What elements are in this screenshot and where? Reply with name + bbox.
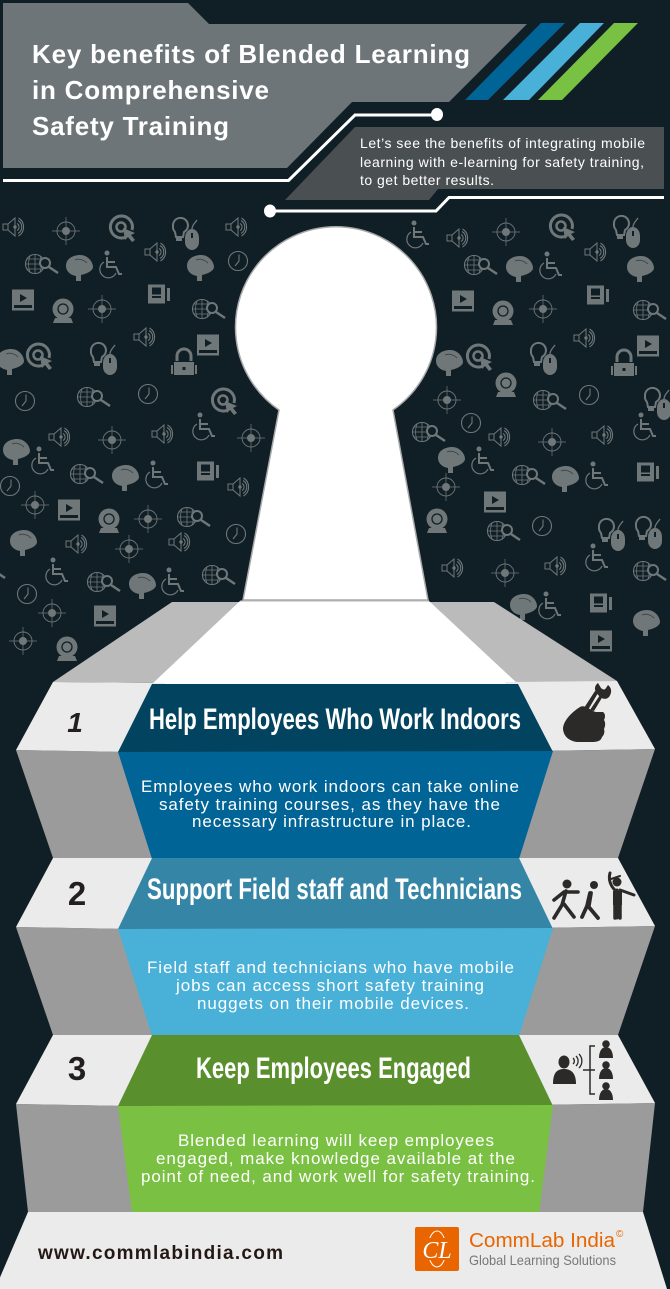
step 1 number: 1 bbox=[67, 707, 83, 738]
step 1 text bbox=[141, 777, 519, 831]
icon: people walking bbox=[554, 873, 634, 918]
step 3 text: Blended learning will keep employees bbox=[178, 1131, 494, 1150]
step 2 text: nuggets on their mobile devices. bbox=[197, 994, 469, 1013]
step 3 text: engaged, make knowledge available at the bbox=[156, 1149, 515, 1168]
icon: hand holding wrench bbox=[563, 683, 611, 742]
step 2 heading band bbox=[118, 858, 553, 929]
logo: CommLab India bbox=[469, 1230, 616, 1252]
title: Safety Training bbox=[32, 111, 229, 141]
logo: Global Learning Solutions bbox=[469, 1252, 616, 1268]
step 3 bbox=[16, 1035, 655, 1213]
connector line with dot: intro bbox=[264, 198, 664, 218]
step 1 bbox=[16, 681, 655, 859]
step 3 text bbox=[141, 1131, 535, 1186]
intro text: to get better results. bbox=[360, 172, 494, 188]
step 1 text: necessary infrastructure in place. bbox=[192, 812, 471, 831]
title: in Comprehensive bbox=[32, 75, 269, 105]
step 1 heading band bbox=[118, 684, 553, 752]
logo bbox=[415, 1227, 624, 1271]
stair top bbox=[53, 601, 617, 684]
intro text: learning with e-learning for safety training, bbox=[360, 154, 644, 170]
step 3 text: point of need, and work well for safety training. bbox=[141, 1167, 535, 1186]
step 2 bbox=[16, 858, 655, 1036]
title bbox=[32, 39, 470, 141]
step 1 side faces bbox=[16, 681, 655, 858]
decorative stripes bbox=[465, 23, 638, 100]
step 1 text: safety training courses, as they have the bbox=[159, 795, 500, 814]
intro text bbox=[360, 135, 645, 188]
step 2 heading: Support Field staff and Technicians bbox=[147, 873, 522, 906]
background icon pattern bbox=[0, 215, 670, 661]
website url: www.commlabindia.com bbox=[37, 1243, 283, 1264]
title banner bbox=[3, 3, 527, 168]
footer bbox=[0, 1212, 667, 1289]
step 3 heading: Keep Employees Engaged bbox=[196, 1052, 471, 1085]
step 1 text: Employees who work indoors can take online bbox=[141, 777, 519, 796]
step 3 heading band bbox=[118, 1035, 553, 1106]
connector line with dot: title bbox=[3, 108, 443, 180]
icon: speaker addressing group bbox=[553, 1040, 613, 1100]
step 2 side faces bbox=[16, 858, 655, 1035]
logo: CL bbox=[422, 1238, 452, 1264]
step 1 body band bbox=[118, 751, 553, 859]
title: Key benefits of Blended Learning bbox=[32, 39, 470, 69]
step 2 body band bbox=[118, 928, 553, 1036]
step 2 text bbox=[147, 958, 514, 1013]
step 1 heading: Help Employees Who Work Indoors bbox=[149, 703, 521, 736]
intro text: Let’s see the benefits of integrating mobile bbox=[360, 135, 645, 151]
step 2 number: 2 bbox=[68, 875, 86, 912]
step 3 side faces bbox=[16, 1035, 655, 1212]
step 3 number: 3 bbox=[68, 1050, 86, 1087]
step 2 text: Field staff and technicians who have mobile bbox=[147, 958, 514, 977]
step 3 body band bbox=[118, 1105, 553, 1213]
step 2 text: jobs can access short safety training bbox=[175, 976, 484, 995]
keyhole bbox=[236, 227, 436, 600]
intro panel bbox=[285, 127, 664, 200]
logo: © bbox=[616, 1229, 624, 1240]
